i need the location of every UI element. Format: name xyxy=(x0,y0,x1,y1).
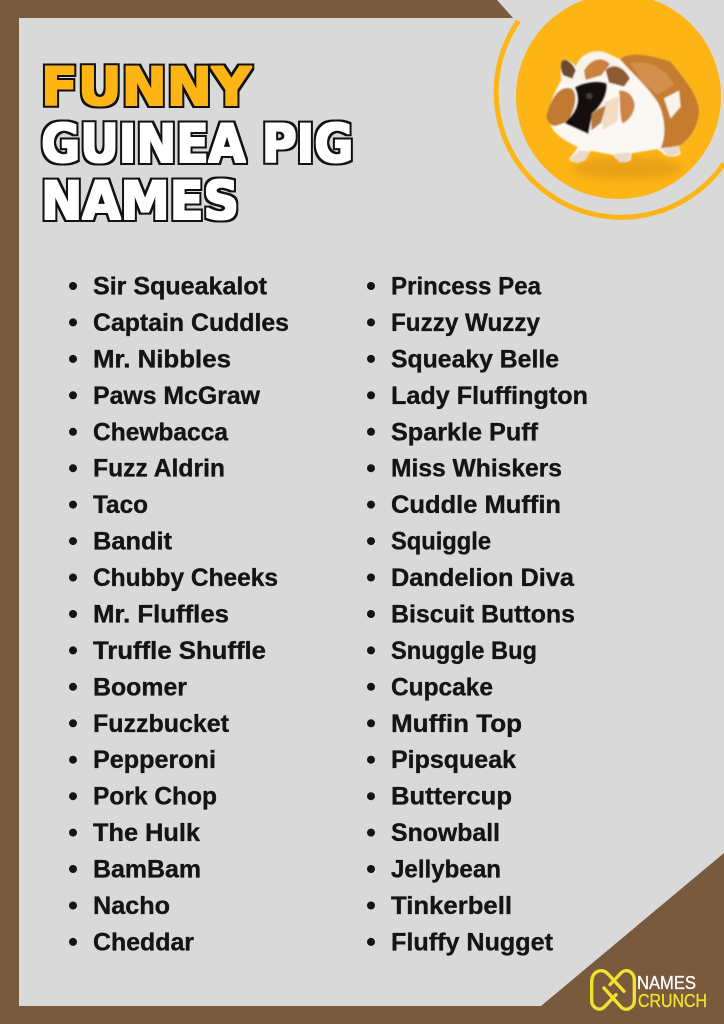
icon: guinea pig xyxy=(546,51,699,180)
title line: GUINEA PIG: GUINEA PIG xyxy=(41,114,353,175)
list: left column of names xyxy=(69,274,289,956)
list: right column of names: Lady Fluffington xyxy=(391,383,588,410)
yellow circle xyxy=(516,0,721,199)
list: left column of names: Boomer xyxy=(93,674,187,701)
list: right column of names: Cupcake xyxy=(391,674,493,701)
list: right column of names: Fluffy Nugget xyxy=(391,929,553,956)
list: left column of names: Mr. Fluffles xyxy=(93,602,229,628)
list: right column of names: Miss Whiskers xyxy=(391,456,562,483)
list: right column of names: Tinkerbell xyxy=(391,893,512,920)
list: right column of names xyxy=(367,274,588,956)
list: left column of names: Truffle Shuffle xyxy=(93,638,266,665)
yellow ring arc xyxy=(496,21,724,217)
icon: N logo mark xyxy=(592,971,634,1009)
circular photo badge xyxy=(496,0,724,217)
list: right column of names: Biscuit Buttons xyxy=(391,602,575,628)
list: left column of names: The Hulk xyxy=(93,820,200,847)
list: right column of names: Squiggle xyxy=(391,529,491,556)
list: left column of names: Fuzzbucket xyxy=(93,711,229,738)
list: left column of names: Nacho xyxy=(93,893,170,920)
list: left column of names: Bandit xyxy=(93,529,172,556)
list: left column of names: Paws McGraw xyxy=(93,383,261,410)
list: right column of names: Cuddle Muffin xyxy=(391,492,561,519)
list: left column of names: Mr. Nibbles xyxy=(93,346,231,373)
title line: FUNNY: FUNNY xyxy=(41,57,252,118)
list: left column of names: Chubby Cheeks xyxy=(93,565,278,592)
list: left column of names: Captain Cuddles xyxy=(93,310,289,337)
list: right column of names: Jellybean xyxy=(391,856,501,884)
list: left column of names: Fuzz Aldrin xyxy=(93,456,225,483)
list: left column of names: Pepperoni xyxy=(93,747,216,774)
list: left column of names: BamBam xyxy=(93,856,201,884)
logo text: NAMES: NAMES xyxy=(637,973,696,993)
title line: NAMES: NAMES xyxy=(41,171,239,232)
logo text: CRUNCH: CRUNCH xyxy=(638,991,707,1011)
list: right column of names: Dandelion Diva xyxy=(391,565,574,592)
list: right column of names: Pipsqueak xyxy=(391,747,516,774)
list: left column of names: Pork Chop xyxy=(93,784,217,811)
logo: Names Crunch xyxy=(592,971,707,1011)
list: right column of names: Squeaky Belle xyxy=(391,346,559,373)
title xyxy=(41,57,353,232)
list: left column of names: Sir Squeakalot xyxy=(93,274,267,300)
list: left column of names: Cheddar xyxy=(93,929,194,956)
list: right column of names: Snuggle Bug xyxy=(391,638,537,665)
list: right column of names: Sparkle Puff xyxy=(391,419,539,446)
list: right column of names: Buttercup xyxy=(391,784,512,811)
list: right column of names: Princess Pea xyxy=(391,274,541,300)
list: right column of names: Snowball xyxy=(391,820,500,847)
list: left column of names: Taco xyxy=(93,492,148,519)
list: right column of names: Muffin Top xyxy=(391,711,522,738)
list: right column of names: Fuzzy Wuzzy xyxy=(391,310,540,337)
list: left column of names: Chewbacca xyxy=(93,419,228,446)
